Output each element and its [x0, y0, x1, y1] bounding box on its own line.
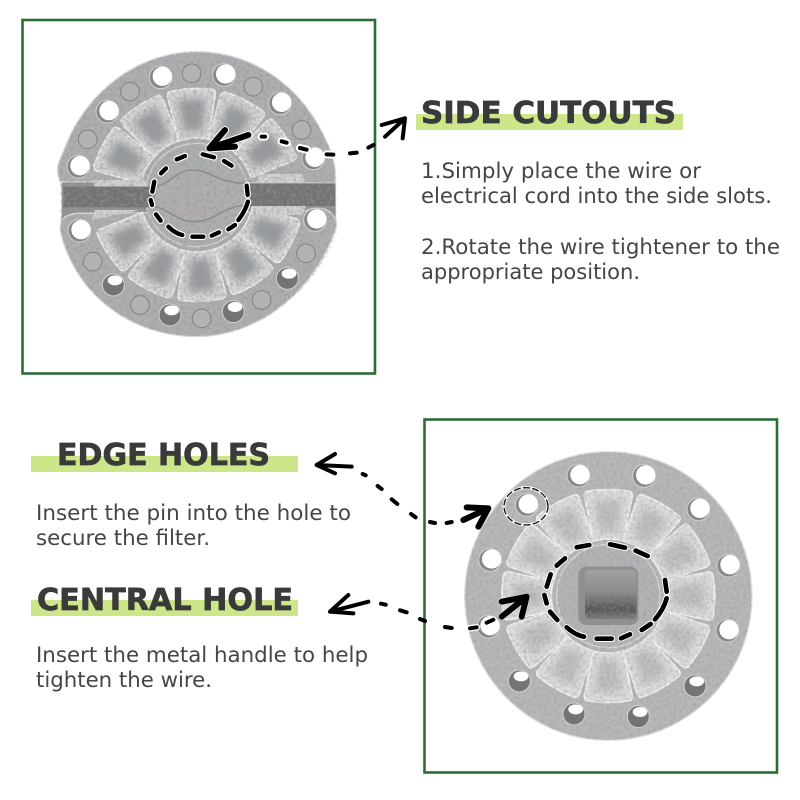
heading text: EDGE HOLES: [57, 438, 270, 473]
edge holes: [477, 464, 740, 728]
petal recesses: [502, 489, 715, 702]
heading text: SIDE CUTOUTS: [421, 96, 676, 131]
arrow: edge holes callout: [317, 454, 488, 527]
central hub: [557, 544, 660, 648]
arrow: side cutouts callout: [209, 118, 405, 155]
slot body: [62, 178, 336, 220]
shaft in centre of slot: [152, 170, 247, 222]
holes and dimples: [67, 64, 326, 328]
highlight bar: [31, 600, 298, 616]
highlight bar: [31, 456, 298, 472]
photo: slotted wire tightener disc: [53, 50, 405, 340]
text: edge holes description: Insert the pin into the hole to: [36, 501, 351, 525]
upper half of disc: [58, 52, 336, 183]
text: central hole description: Insert the metal handle to help: [36, 643, 368, 667]
heading text: CENTRAL HOLE: [37, 583, 293, 618]
panel: holes photo: [317, 420, 777, 772]
heading: side cutouts: [416, 96, 683, 131]
text: side cutouts instructions: [421, 159, 780, 284]
large dashed circle marker: [544, 544, 667, 639]
square centre hole: [578, 567, 638, 625]
petal recesses: [91, 87, 302, 303]
metal grain: [463, 450, 753, 742]
slot slivers: [92, 174, 307, 220]
small dashed circle marker: [504, 488, 548, 525]
central hub: [145, 143, 248, 247]
text: central hole description: [36, 643, 368, 692]
text: edge holes description: secure the filter.: [36, 526, 210, 550]
lower half of disc: [60, 208, 337, 337]
text: central hole description: tighten the wire.: [36, 668, 212, 692]
text: side cutouts instructions: 1.Simply place the wire or: [421, 159, 701, 183]
text: side cutouts instructions: appropriate position.: [421, 260, 640, 284]
photo: square-hole wire tightener disc: [317, 450, 753, 742]
metal grain: [53, 50, 340, 340]
dark slot band: [63, 183, 335, 207]
panel frame: bottom photo: [424, 420, 777, 772]
panel: side cutouts photo: [22, 20, 405, 374]
arrow: central hole callout: [330, 595, 527, 628]
disc body: [465, 452, 752, 740]
highlight bar: [416, 114, 683, 130]
text: edge holes description: [36, 501, 351, 550]
panel frame: top photo: [22, 20, 375, 374]
heading: central hole: [31, 583, 298, 618]
dashed circle marker: [151, 154, 248, 237]
text: side cutouts instructions: 2.Rotate the wire tightener to the: [421, 235, 780, 259]
heading: edge holes: [31, 438, 298, 473]
text: side cutouts instructions: electrical cord into the side slots.: [421, 184, 772, 208]
